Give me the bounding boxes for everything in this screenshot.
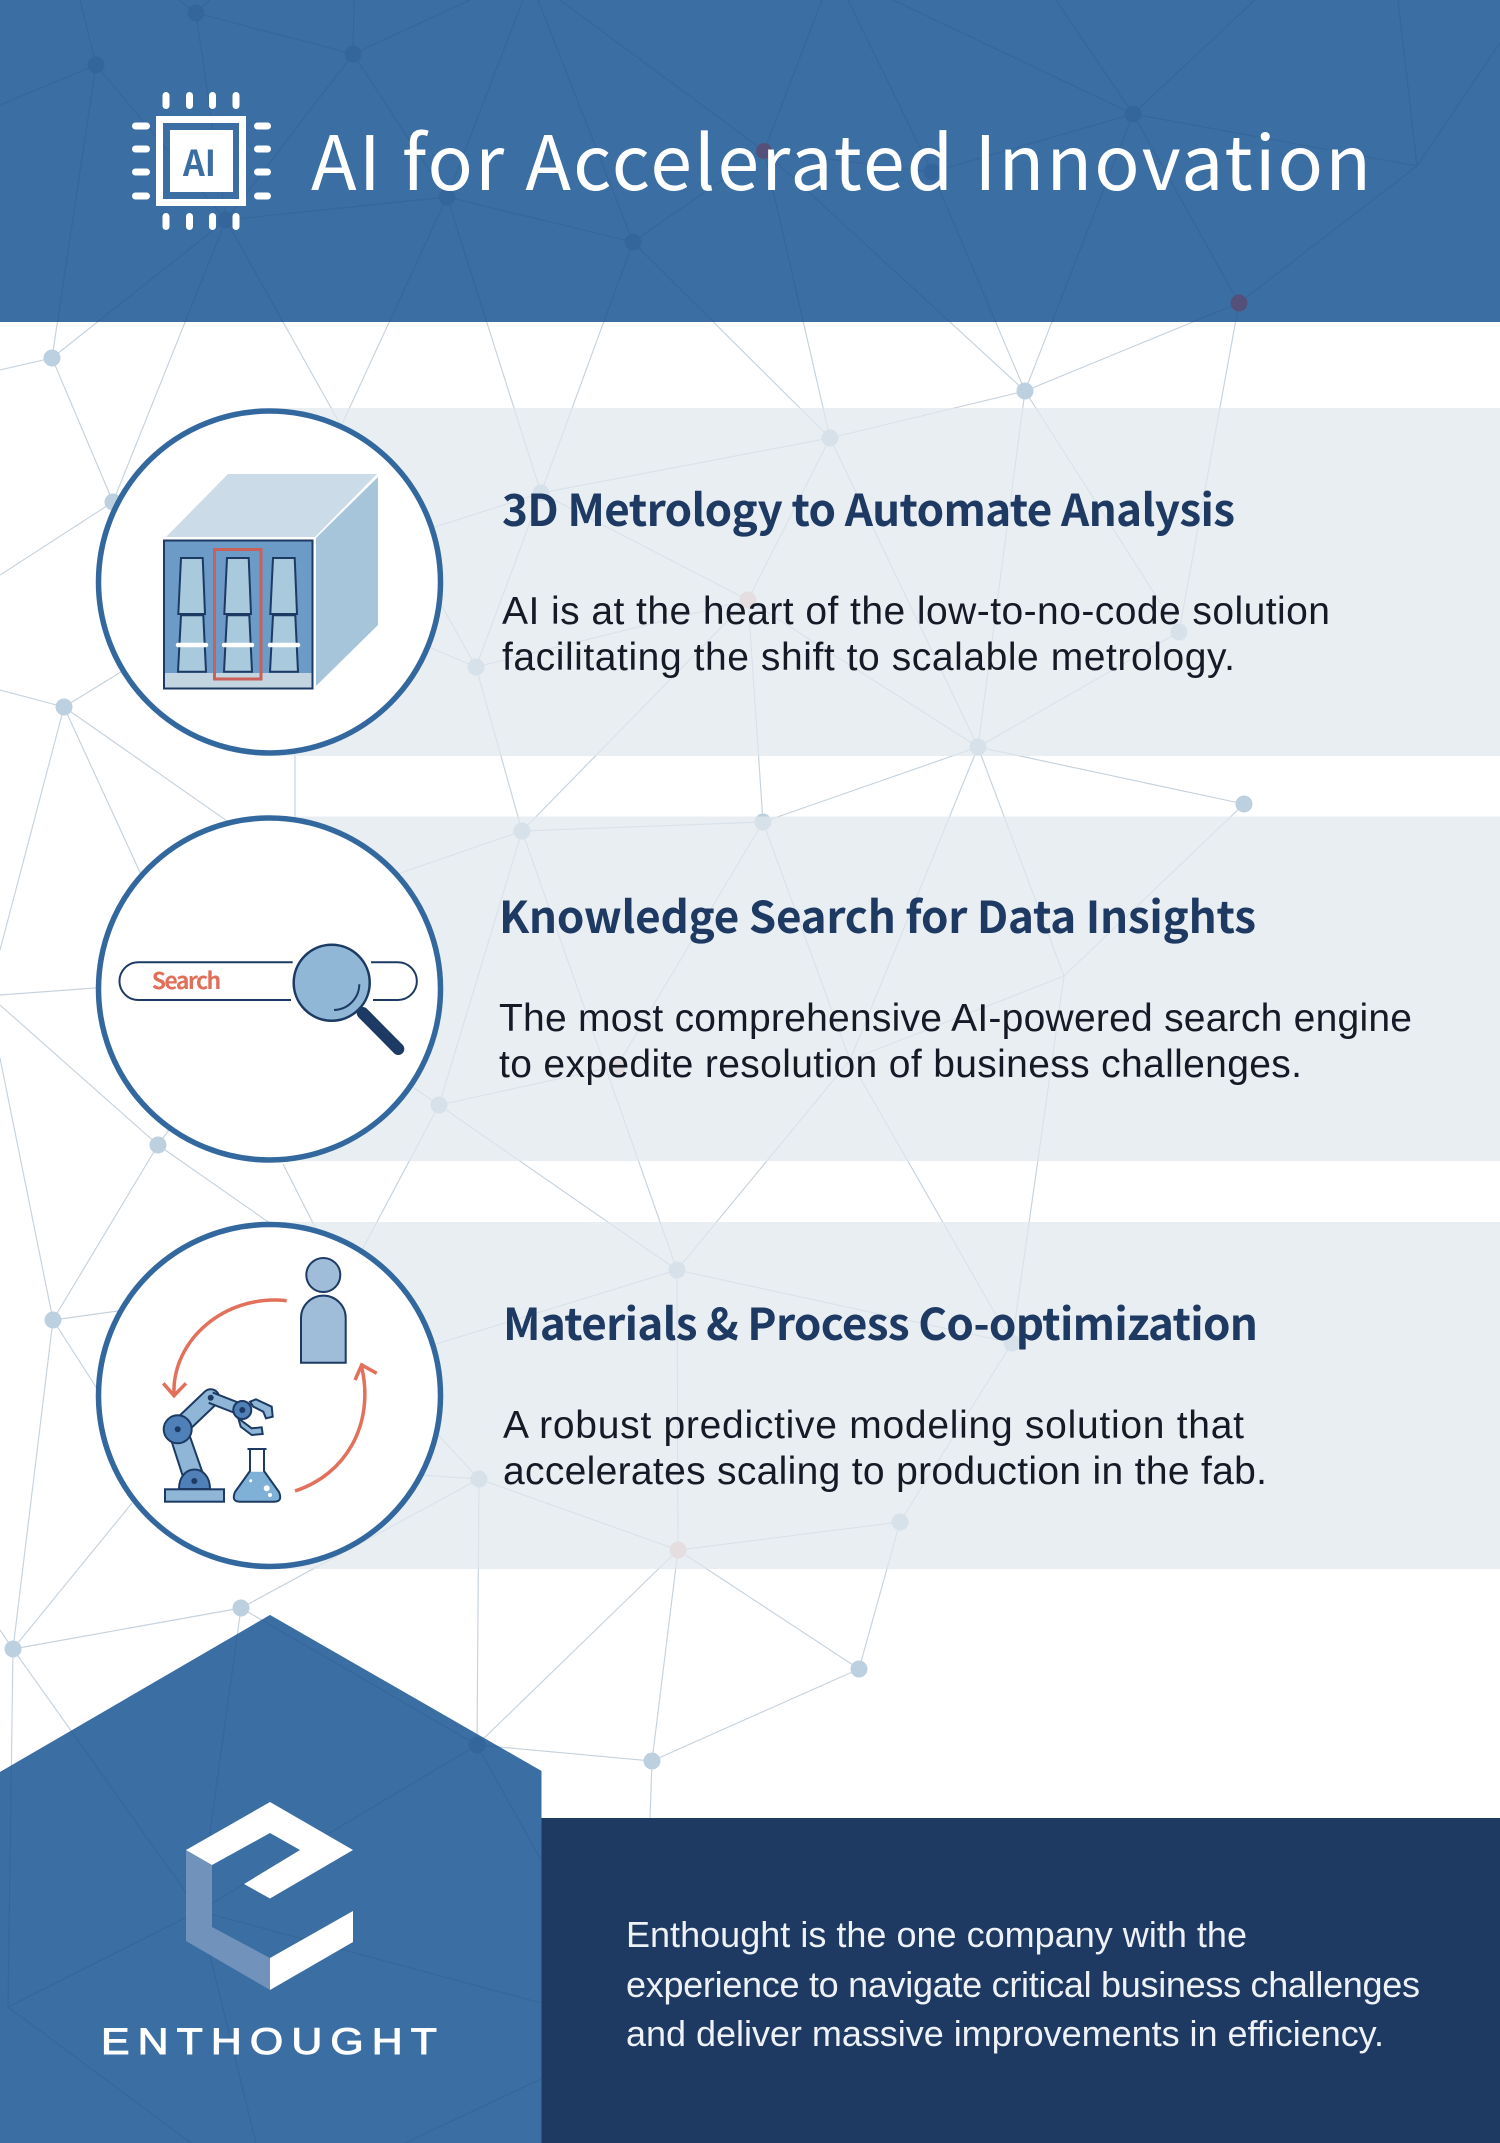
footer text: and deliver massive improvements in efficiency. xyxy=(626,2013,1384,2054)
icon: co-optimization circle xyxy=(98,1224,440,1566)
header network softening veil xyxy=(0,0,1500,322)
Enthought wordmark: ENTHOUGHT xyxy=(101,2021,445,2062)
logo hexagon panel xyxy=(0,1615,542,2143)
text: 3D metrology description: facilitating the shift to scalable metrology. xyxy=(502,636,1235,679)
accent nodes on header xyxy=(756,143,1248,312)
footer text: experience to navigate critical business challenges xyxy=(626,1964,1420,2005)
panel: knowledge search band xyxy=(270,816,1500,1161)
header banner xyxy=(0,0,1500,322)
footer text: Enthought is the one company with the xyxy=(626,1914,1247,1955)
Enthought logo mark xyxy=(186,1802,353,1990)
heading: knowledge search: Knowledge Search for Data Insights xyxy=(499,882,1256,946)
icon: 3D metrology circle xyxy=(98,411,440,753)
heading: materials and process: Materials & Process Co-optimization xyxy=(503,1289,1258,1353)
text: knowledge search description: The most comprehensive AI-powered search engine xyxy=(499,997,1412,1040)
heading: 3D metrology: 3D Metrology to Automate Analysis xyxy=(502,475,1235,539)
panel: materials band xyxy=(270,1222,1500,1569)
title: AI for Accelerated Innovation xyxy=(311,103,1371,212)
chip icon xyxy=(136,96,268,226)
icon: search circle xyxy=(98,818,440,1160)
icon: search circle: Search xyxy=(152,962,221,996)
text: knowledge search description: to expedite resolution of business challenges. xyxy=(499,1043,1302,1086)
panel: 3D metrology band xyxy=(270,408,1500,756)
chip icon: AI xyxy=(182,135,216,187)
footer panel xyxy=(542,1818,1500,2143)
text: 3D metrology description: AI is at the heart of the low-to-no-code solution xyxy=(502,590,1330,633)
text: materials description: accelerates scaling to production in the fab. xyxy=(503,1450,1267,1493)
hexagon network softening veil xyxy=(0,1615,542,2143)
text: materials description: A robust predictive modeling solution that xyxy=(503,1404,1244,1447)
